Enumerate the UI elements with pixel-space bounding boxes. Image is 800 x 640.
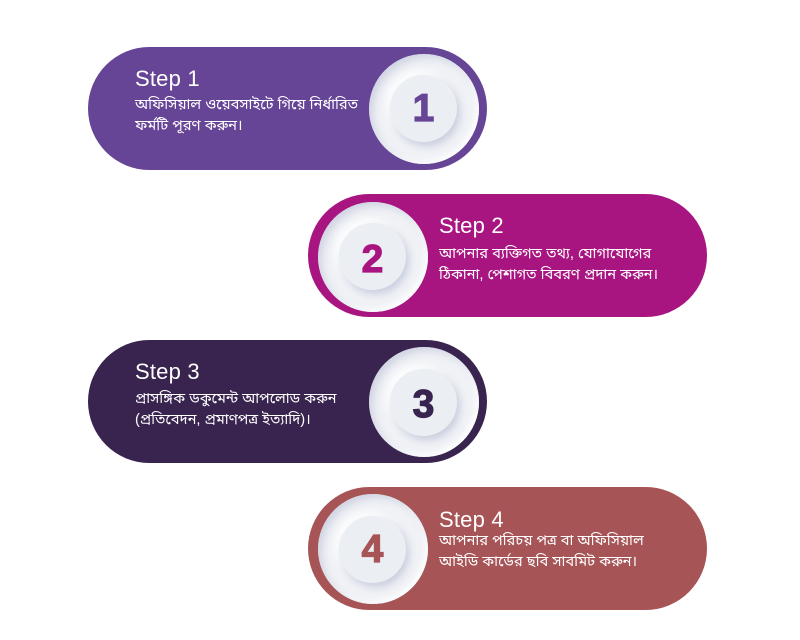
text: step 2 description [438,245,658,283]
text: step 2 description: আপনার ব্যক্তিগত তথ্য, যোগাযোগের [439,246,651,262]
icon: number 3 disc: 3 [413,383,434,426]
heading: step 2: Step 2 [439,213,504,238]
text: step 1 description: অফিসিয়াল ওয়েবসাইটে গিয়ে নির্ধারিত [135,97,358,113]
icon: number 4 disc: 4 [362,528,383,571]
panel: step 1 [88,47,487,170]
heading: step 1: Step 1 [135,66,200,91]
panel: step 2 [308,194,707,317]
panel: step 3 [88,340,487,463]
text: step 4 description: আইডি কার্ডের ছবি সাবমিট করুন। [439,554,637,570]
icon: number 2 disc: 2 [362,238,383,281]
text: step 3 description: প্রাসঙ্গিক ডকুমেন্ট আপলোড করুন [135,391,336,407]
icon: number 2 disc [318,202,428,312]
panel: step 4 [308,487,707,610]
icon: number 4 disc [318,494,428,604]
text: step 3 description: (প্রতিবেদন, প্রমাণপত্র ইত্যাদি)। [135,412,311,428]
icon: number 1 disc: 1 [413,87,434,130]
icon: number 3 disc [369,347,479,457]
text: step 4 description [438,532,644,570]
heading: step 3: Step 3 [135,359,200,384]
text: step 1 description: ফর্মটি পূরণ করুন। [135,118,243,134]
heading: step 4: Step 4 [439,507,504,532]
text: step 4 description: আপনার পরিচয় পত্র বা অফিসিয়াল [439,533,644,549]
text: step 2 description: ঠিকানা, পেশাগত বিবরণ প্রদান করুন। [439,267,658,283]
text: step 3 description [135,390,337,428]
text: step 1 description [134,96,358,134]
icon: number 1 disc [369,54,479,164]
